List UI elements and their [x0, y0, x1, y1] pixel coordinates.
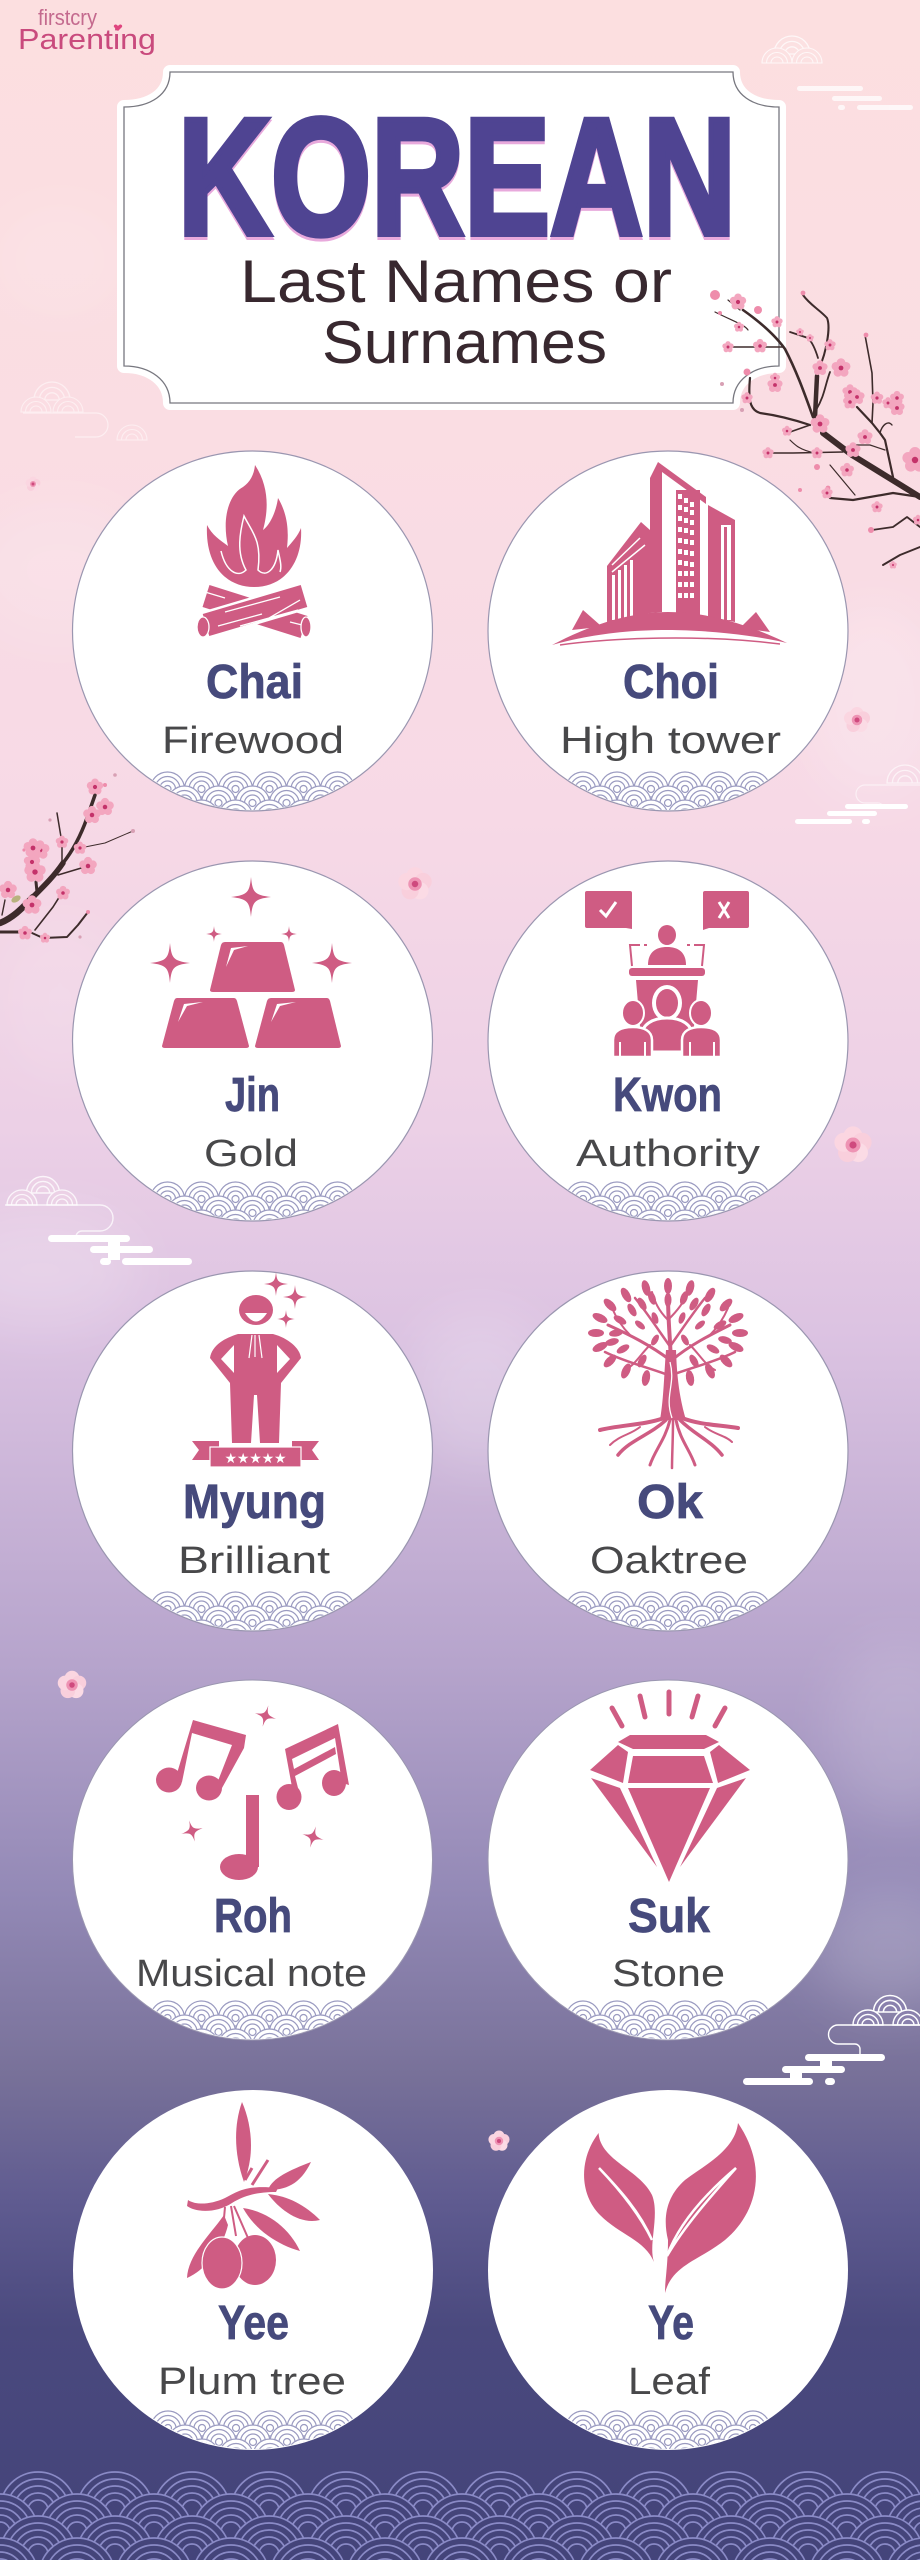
name: Chai — [206, 656, 303, 709]
floating petal near Kwon — [834, 1126, 872, 1162]
meaning: Oaktree — [590, 1540, 748, 1582]
cherry blossom branch left — [0, 773, 135, 943]
floating petal near Jin — [398, 867, 432, 899]
logo: FirstCry Parenting: firstcry — [38, 5, 97, 30]
icon: plum branch — [187, 2102, 320, 2289]
name: Ok — [637, 1476, 703, 1529]
meaning: Gold — [204, 1133, 298, 1175]
meaning: Musical note — [136, 1953, 367, 1995]
decorative cloud right middle — [795, 765, 920, 824]
name: Roh — [214, 1890, 292, 1943]
card: Yee — [73, 2090, 433, 2473]
decorative cloud near title bottom left — [21, 382, 147, 440]
name: Ye — [648, 2297, 694, 2350]
name: Jin — [225, 1069, 280, 1122]
decorative cloud right lower — [743, 1996, 920, 2085]
icon: speaker and audience — [585, 891, 749, 1057]
title card — [124, 72, 779, 403]
logo: FirstCry Parenting: Parenting — [18, 24, 156, 56]
icon: musical notes — [156, 1703, 349, 1880]
icon: leaves — [584, 2123, 756, 2293]
card: Jin — [72, 861, 432, 1244]
logo: FirstCry Parenting — [18, 5, 156, 56]
floating petal near Choi — [844, 707, 870, 732]
name: Myung — [183, 1476, 326, 1529]
icon: campfire — [197, 465, 311, 637]
card: Choi — [488, 451, 848, 834]
subtitle line 1: Last Names or — [240, 248, 672, 315]
icon: gold bars with sparkles — [150, 877, 352, 1048]
meaning: Stone — [612, 1953, 725, 1995]
icon: smiling man on ribbon — [192, 1272, 319, 1467]
meaning: Leaf — [628, 2361, 710, 2403]
meaning: Plum tree — [158, 2361, 346, 2403]
floating petal near Roh — [58, 1671, 86, 1698]
decorative cloud left middle — [5, 1176, 192, 1265]
cherry blossom branch top right — [710, 290, 920, 568]
card: Suk — [488, 1680, 848, 2063]
meaning: Authority — [576, 1133, 760, 1175]
title: KOREAN: KOREAN — [178, 85, 736, 270]
name: Suk — [628, 1890, 710, 1943]
card: Myung — [72, 1271, 432, 1654]
subtitle line 2: Surnames — [322, 309, 607, 376]
icon: diamond stone — [590, 1692, 750, 1882]
card: Roh — [72, 1680, 432, 2063]
card: Ye — [488, 2090, 848, 2473]
card: Chai — [72, 451, 432, 834]
name: Choi — [623, 656, 719, 709]
title: KOREAN: KOREAN — [178, 88, 736, 273]
meaning: Brilliant — [178, 1540, 331, 1582]
card: Kwon — [488, 861, 848, 1244]
icon: smiling man on ribbon: ★★★★★ — [224, 1451, 286, 1467]
card: Ok — [488, 1271, 848, 1654]
floating petal near Ye — [488, 2130, 510, 2151]
meaning: Firewood — [162, 720, 344, 762]
name: Yee — [218, 2297, 289, 2350]
icon: oak tree with roots — [588, 1278, 748, 1468]
icon: high tower — [552, 462, 787, 645]
background soft clouds — [0, 200, 920, 2010]
meaning: High tower — [560, 720, 781, 762]
bottom wave pattern band — [0, 2472, 920, 2560]
decorative cloud top right — [762, 36, 913, 110]
floating petal near Chai — [26, 477, 40, 491]
name: Kwon — [613, 1069, 722, 1122]
